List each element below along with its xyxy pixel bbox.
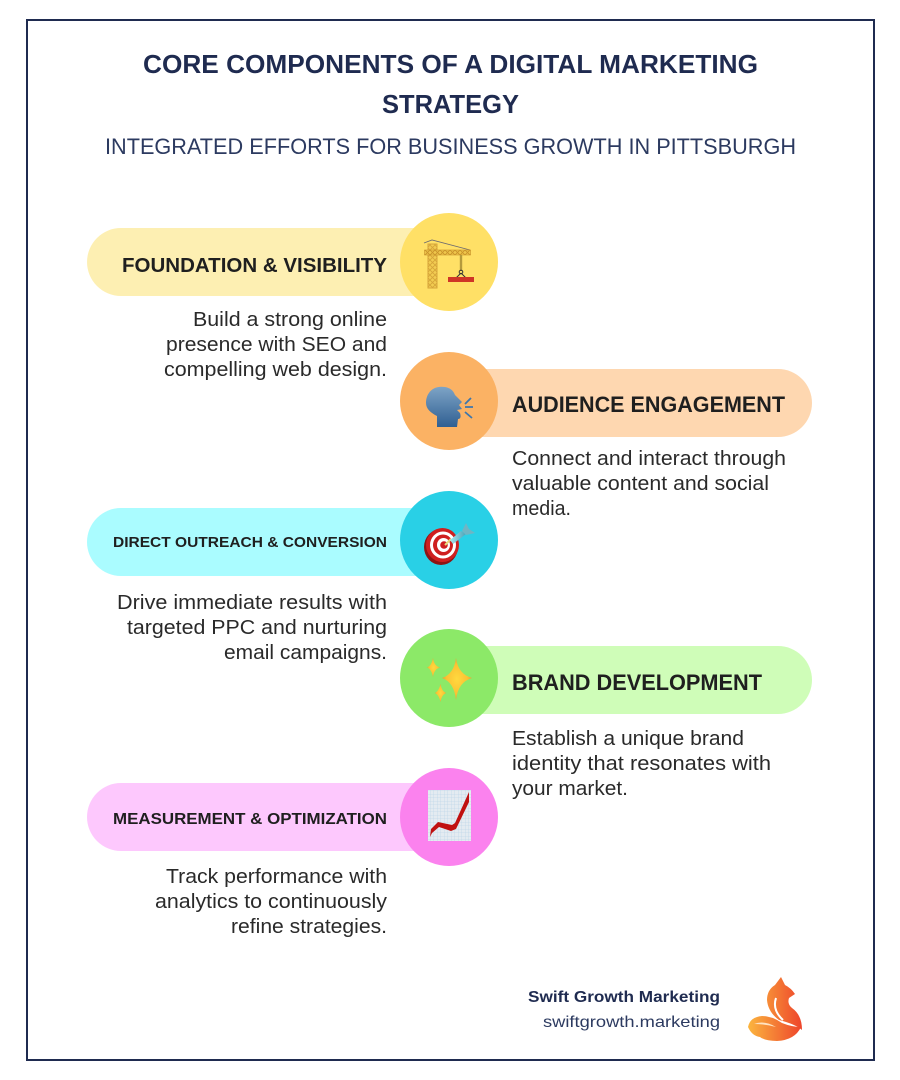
pill: audience [449,369,812,437]
text: direct outreach description: targeted PPC and nurturing [127,617,387,639]
circle: direct outreach [400,491,498,589]
icon: fox logo [748,977,802,1041]
panel: measurement and optimization [87,768,498,938]
heading: foundation: FOUNDATION & VISIBILITY [122,255,388,277]
pill: foundation [87,228,449,296]
pill: direct outreach [87,508,449,576]
heading: brand: BRAND DEVELOPMENT [512,670,763,695]
pill: brand [449,646,812,714]
text: foundation description: Build a strong online [193,309,387,331]
text: audience description: media. [512,498,571,520]
text: brand description: Establish a unique brand [512,728,744,750]
title [143,49,758,119]
text: audience description [512,448,786,520]
text: measurement description: analytics to continuously [155,891,387,913]
text: foundation description: compelling web design. [164,359,387,381]
text: brand description [512,728,771,800]
text: direct outreach description [117,592,387,664]
panel: direct outreach and conversion [87,491,498,664]
panel: audience engagement [400,352,812,520]
text: brand description: your market. [512,778,628,800]
footer website: swiftgrowth.marketing [543,1014,720,1031]
subtitle: INTEGRATED EFFORTS FOR BUSINESS GROWTH IN PITTSBURGH [105,134,796,159]
icon: sparkles [427,658,472,702]
icon: rising chart [428,790,471,841]
title: STRATEGY [382,89,519,119]
text: measurement description: Track performance with [166,866,387,888]
text: brand description: identity that resonates with [512,753,771,775]
text: audience description: valuable content and social [512,473,769,495]
footer brand name: Swift Growth Marketing [528,989,720,1006]
text: direct outreach description: Drive immediate results with [117,592,387,614]
circle: measurement [400,768,498,866]
title: CORE COMPONENTS OF A DIGITAL MARKETING [143,49,758,79]
heading: measurement: MEASUREMENT & OPTIMIZATION [113,811,387,828]
icon: target with dart [424,523,475,565]
pill: measurement [87,783,449,851]
text: measurement description: refine strategies. [231,916,387,938]
panel: foundation and visibility [87,213,498,381]
text: audience description: Connect and interact through [512,448,786,470]
icon: speaking head [426,387,473,427]
text: direct outreach description: email campaigns. [224,642,387,664]
text: measurement description [155,866,387,938]
text: foundation description [164,309,387,381]
panel: brand development [400,629,812,800]
heading: audience: AUDIENCE ENGAGEMENT [512,392,786,417]
circle: foundation [400,213,498,311]
circle: brand [400,629,498,727]
circle: audience [400,352,498,450]
text: foundation description: presence with SEO and [166,334,387,356]
heading: direct outreach: DIRECT OUTREACH & CONVERSION [113,534,387,551]
icon: construction crane [424,240,474,288]
